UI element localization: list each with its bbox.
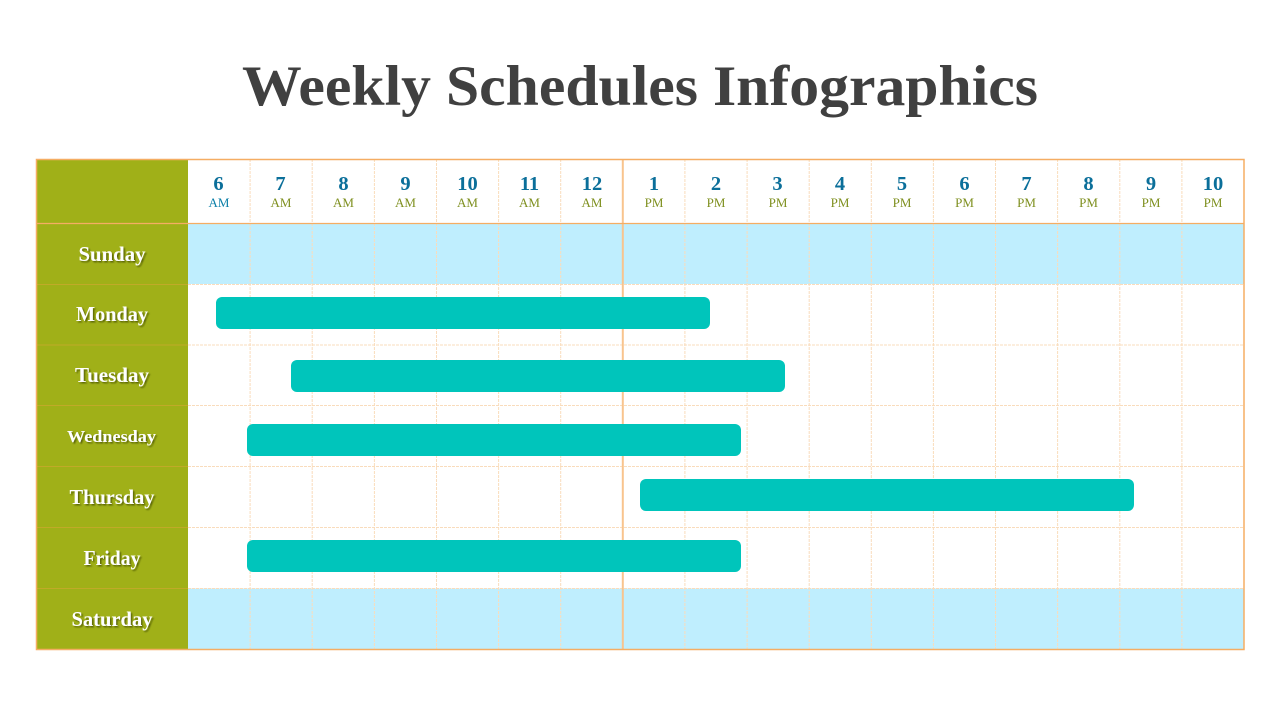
hour: 10 AM: 10 (457, 173, 478, 195)
hour: 8 PM: PM (1079, 195, 1098, 210)
title: Weekly Schedules Infographics (242, 55, 1038, 118)
day column background (36, 159, 188, 650)
hour: 12 AM (582, 173, 603, 210)
day: Friday: Friday (84, 546, 141, 570)
hour: 5 PM: 5 (897, 173, 907, 195)
hour: 7 AM: AM (271, 195, 292, 210)
hour: 10 PM: 10 (1203, 173, 1223, 195)
day: Thursday: Thursday (70, 485, 155, 509)
day: Saturday: Saturday (72, 607, 153, 631)
hour: 4 PM (831, 173, 850, 210)
hour: 3 PM: PM (769, 195, 788, 210)
hour: 10 PM: PM (1204, 195, 1223, 210)
time header (209, 173, 1223, 210)
hour: 7 PM (1017, 173, 1036, 210)
hour: 6 PM: PM (955, 195, 974, 210)
bar: Wednesday (247, 424, 741, 456)
weekend band: Sunday (188, 223, 1244, 284)
day labels (67, 242, 157, 631)
hour: 6 AM: 6 (213, 173, 224, 195)
bar: Tuesday (291, 360, 785, 392)
hour: 10 PM (1203, 173, 1223, 210)
day: Sunday: Sunday (78, 242, 146, 266)
day: Tuesday: Tuesday (75, 363, 149, 387)
hour: 8 PM: 8 (1083, 173, 1094, 195)
hour: 12 AM: AM (582, 195, 603, 210)
hour: 10 AM (457, 173, 478, 210)
table border (36, 160, 1244, 650)
hour: 6 AM (209, 173, 230, 210)
hour: 9 PM: 9 (1146, 173, 1156, 195)
hour: 7 PM: 7 (1021, 173, 1032, 195)
hour: 3 PM (769, 173, 788, 210)
hour: 2 PM: PM (707, 195, 726, 210)
hour: 11 AM: AM (519, 195, 540, 210)
bar: Friday (247, 540, 741, 572)
hour: 4 PM: 4 (835, 173, 845, 195)
hour: 1 PM (645, 173, 664, 210)
day: Wednesday: Wednesday (67, 427, 157, 446)
hour: 9 AM (395, 173, 416, 210)
hour: 2 PM (707, 173, 726, 210)
hour: 8 AM: 8 (338, 173, 349, 195)
hour: 3 PM: 3 (772, 173, 783, 195)
hour: 6 PM: 6 (959, 173, 970, 195)
hour: 6 PM (955, 173, 974, 210)
hour: 1 PM: PM (645, 195, 664, 210)
hour: 7 AM: 7 (275, 173, 286, 195)
hour: 8 PM (1079, 173, 1098, 210)
hour: 9 PM: PM (1142, 195, 1161, 210)
hour: 7 PM: PM (1017, 195, 1036, 210)
day: Monday: Monday (76, 302, 148, 326)
hour: 12 AM: 12 (582, 173, 602, 195)
hour: 5 PM (893, 173, 912, 210)
hour: 11 AM: 11 (520, 173, 539, 195)
schedule bars (216, 297, 1134, 572)
hour: 4 PM: PM (831, 195, 850, 210)
hour: 7 AM (271, 173, 292, 210)
hour: 8 AM: AM (333, 195, 354, 210)
bar: Monday (216, 297, 710, 329)
hour: 10 AM: AM (457, 195, 478, 210)
noon divider (622, 159, 624, 650)
hour: 2 PM: 2 (711, 173, 721, 195)
bar: Thursday (640, 479, 1134, 511)
hour: 1 PM: 1 (649, 173, 659, 195)
hour: 6 AM: AM (209, 195, 230, 210)
weekend band: Saturday (188, 588, 1244, 650)
hour: 9 AM: 9 (400, 173, 411, 195)
hour: 9 PM (1142, 173, 1161, 210)
hour: 11 AM (519, 173, 540, 210)
hour: 9 AM: AM (395, 195, 416, 210)
hour: 8 AM (333, 173, 354, 210)
hour: 5 PM: PM (893, 195, 912, 210)
panel: weekly schedule table (36, 159, 1244, 650)
